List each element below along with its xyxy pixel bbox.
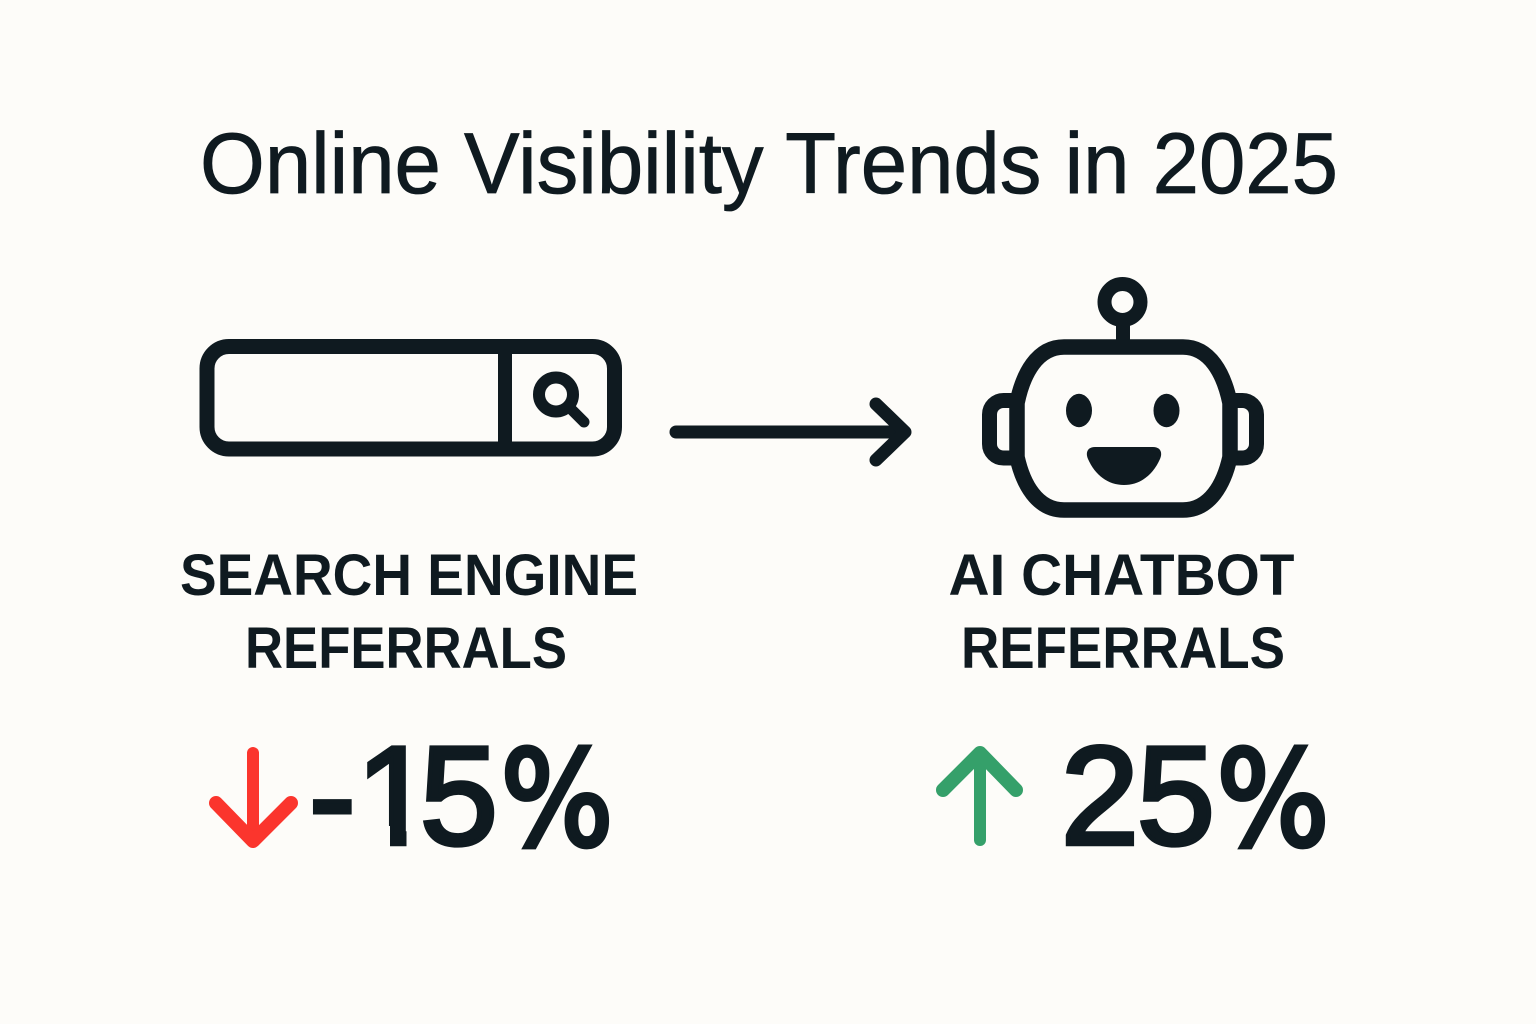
stat: AI change bbox=[1061, 717, 1329, 877]
stat: AI change: 25 bbox=[1061, 717, 1215, 874]
icon: red down arrow bbox=[216, 753, 291, 841]
icon: robot bbox=[990, 284, 1256, 510]
title: Online Visibility Trends in 2025 bbox=[200, 116, 1338, 212]
label: AI chatbot referrals bbox=[948, 543, 1294, 681]
stat: search change: -1 bbox=[309, 717, 434, 874]
stat: search change bbox=[309, 717, 613, 877]
label: search engine referrals: SEARCH ENGINE bbox=[180, 543, 638, 608]
stat: search change: 5 bbox=[420, 717, 498, 874]
label: AI chatbot referrals: AI CHATBOT bbox=[948, 543, 1294, 608]
label: search engine referrals bbox=[180, 543, 638, 681]
label: search engine referrals: REFERRALS bbox=[245, 616, 567, 681]
icon: green up arrow bbox=[943, 753, 1016, 840]
label: AI chatbot referrals: REFERRALS bbox=[961, 616, 1285, 681]
icon: search bar bbox=[207, 346, 614, 449]
stat: search change: % bbox=[500, 722, 613, 877]
stat: AI change: % bbox=[1216, 722, 1329, 877]
arrow: search to AI bbox=[676, 404, 905, 460]
